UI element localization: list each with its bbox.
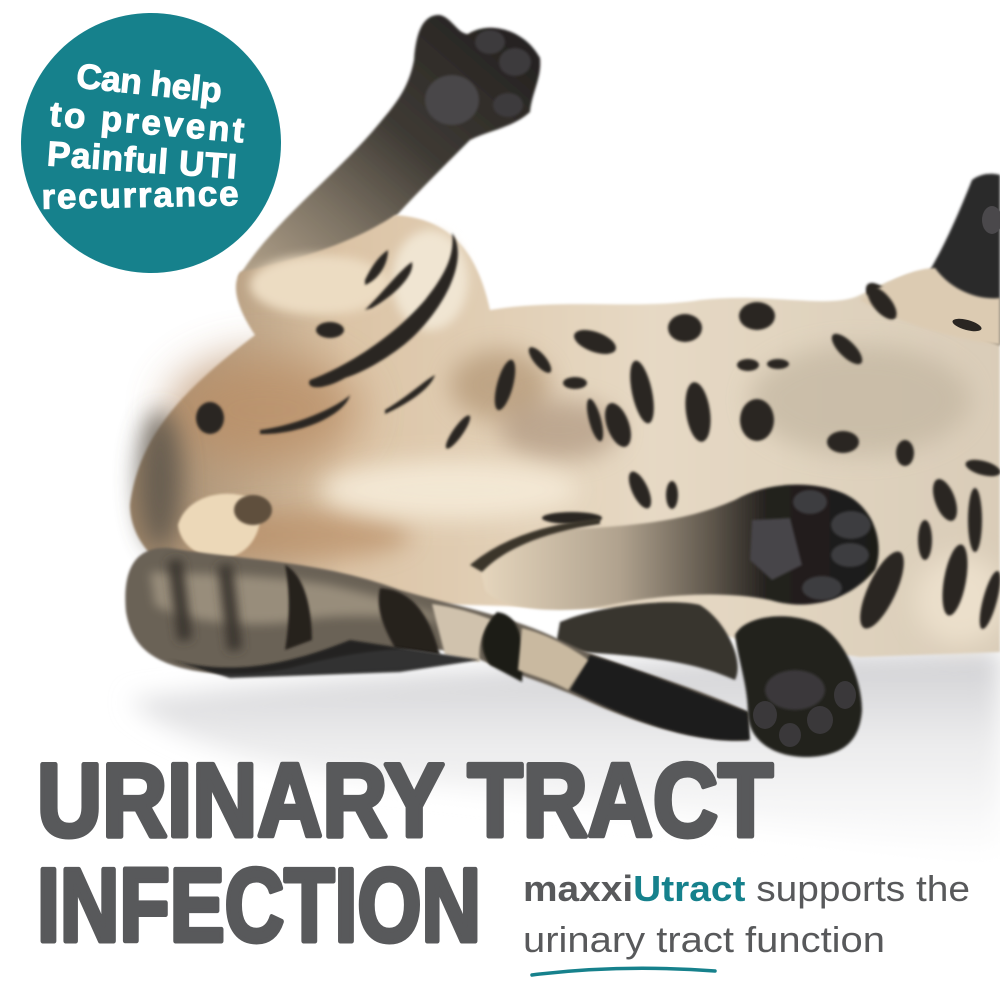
cat body	[130, 215, 1000, 657]
badge line 4: recurrance	[41, 174, 239, 217]
badge line 2: to prevent	[48, 95, 246, 150]
subtitle	[523, 868, 970, 960]
badge line 3: Painful UTI	[46, 134, 238, 187]
badge line 1: Can help	[75, 56, 224, 111]
title line 2: INFECTION	[37, 848, 481, 964]
badge: UTI recurrence	[21, 13, 281, 273]
floor shadow	[130, 650, 1000, 860]
cat tail	[125, 548, 750, 741]
product statement line 2: urinary tract function	[523, 919, 885, 960]
title line 1: URINARY TRACT	[37, 743, 773, 859]
cat raised hind leg	[238, 15, 540, 278]
title	[37, 743, 773, 964]
product statement line 1: maxxiUtract supports the	[523, 868, 970, 909]
cat front leg and paw	[470, 485, 879, 610]
cat upper right paw	[860, 174, 1000, 345]
cat lower paw	[735, 616, 862, 757]
photo: lying cat	[125, 15, 1000, 757]
cat dark underside	[555, 602, 738, 680]
underline swoosh	[532, 968, 715, 975]
cat stripes and spots	[196, 233, 1000, 634]
